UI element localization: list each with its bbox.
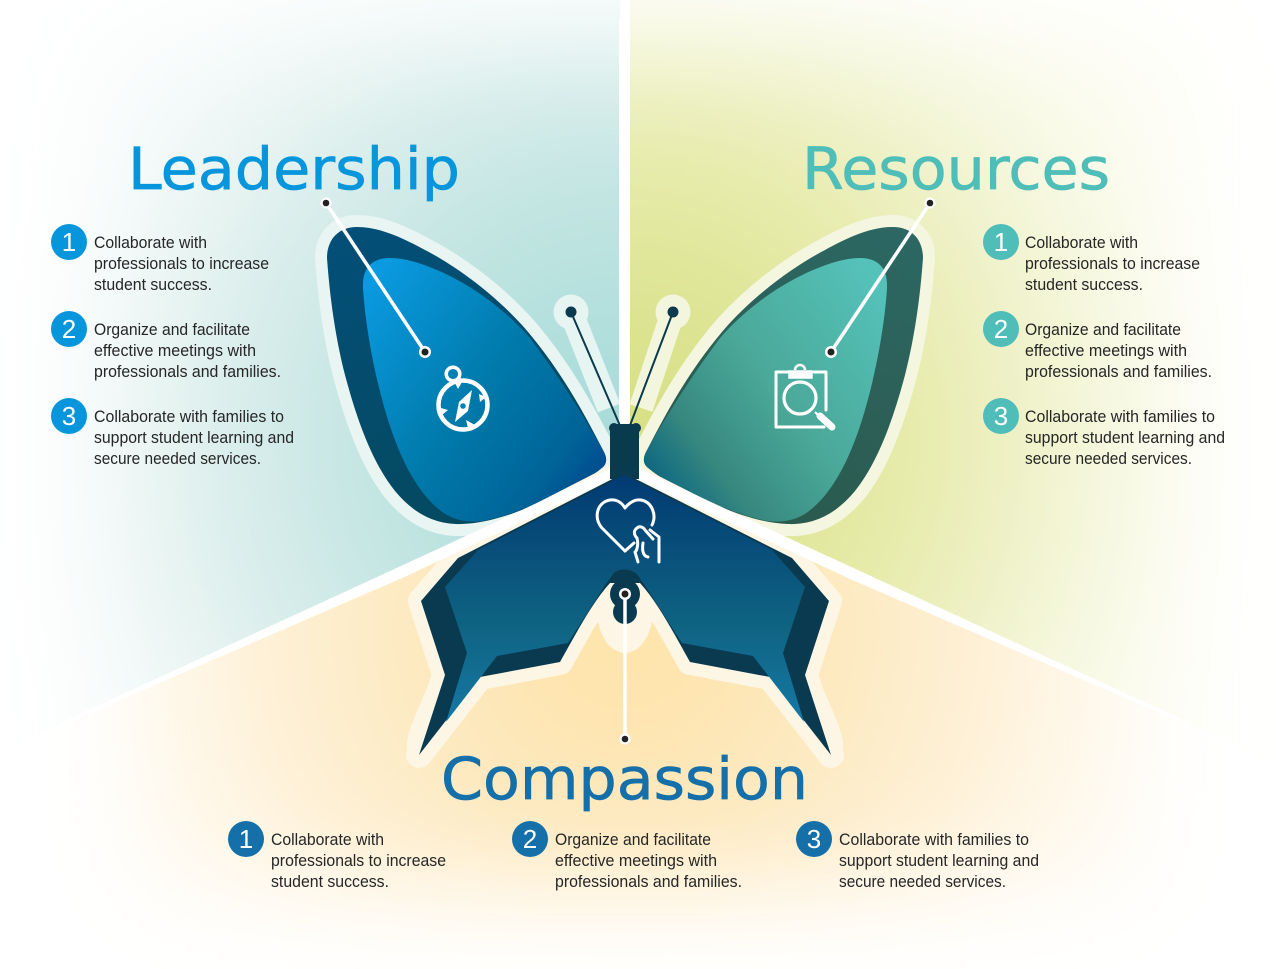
resources item 3: support student learning and bbox=[1025, 428, 1225, 447]
background sector: resources bbox=[630, 0, 1204, 718]
leadership item 3: Collaborate with families to bbox=[94, 407, 284, 426]
compassion item 3: support student learning and bbox=[839, 851, 1039, 870]
background sector: compassion bbox=[118, 561, 1148, 942]
heading: Leadership: Leadership bbox=[128, 135, 460, 203]
heading: Compassion: Compassion bbox=[441, 745, 808, 813]
resources item 3: Collaborate with families to bbox=[1025, 407, 1215, 426]
antennae lines bbox=[566, 306, 678, 428]
compassion item 1: 1 bbox=[239, 824, 253, 854]
leadership item 1 bbox=[51, 224, 269, 294]
resources item 3: 3 bbox=[994, 401, 1008, 431]
right wing bbox=[644, 227, 923, 524]
leadership item 1: professionals to increase bbox=[94, 254, 269, 273]
resources item 1: student success. bbox=[1025, 275, 1143, 294]
resources item 2 bbox=[983, 311, 1212, 381]
compassion item 2: 2 bbox=[523, 824, 537, 854]
leadership item 2 bbox=[51, 311, 281, 381]
resources item 2: effective meetings with bbox=[1025, 341, 1187, 360]
compassion item 3: secure needed services. bbox=[839, 872, 1006, 891]
compassion item 2: effective meetings with bbox=[555, 851, 717, 870]
leadership item 2: professionals and families. bbox=[94, 362, 281, 381]
compassion item 2: professionals and families. bbox=[555, 872, 742, 891]
heading: Resources: Resources bbox=[802, 135, 1110, 203]
compassion item 3: 3 bbox=[807, 824, 821, 854]
left wing bbox=[327, 227, 606, 524]
icon: heart in hand bbox=[597, 500, 659, 562]
compassion item 2 bbox=[512, 821, 742, 891]
divider lines bbox=[60, 20, 1190, 726]
resources item 3 bbox=[983, 398, 1225, 468]
leadership item 3: secure needed services. bbox=[94, 449, 261, 468]
compassion item 1: professionals to increase bbox=[271, 851, 446, 870]
butterfly upper body bbox=[609, 423, 641, 479]
resources item 3: secure needed services. bbox=[1025, 449, 1192, 468]
compassion item 1: student success. bbox=[271, 872, 389, 891]
lower wing halo bbox=[407, 473, 843, 761]
resources item 2: 2 bbox=[994, 314, 1008, 344]
resources item 1: professionals to increase bbox=[1025, 254, 1200, 273]
leadership item 2: 2 bbox=[62, 314, 76, 344]
leadership item 1: 1 bbox=[62, 227, 76, 257]
antennae halos bbox=[554, 294, 690, 408]
leadership item 3 bbox=[51, 398, 294, 468]
leadership item 2: Organize and facilitate bbox=[94, 320, 250, 339]
resources item 2: Organize and facilitate bbox=[1025, 320, 1181, 339]
compassion item 2: Organize and facilitate bbox=[555, 830, 711, 849]
leadership item 3: 3 bbox=[62, 401, 76, 431]
resources item 1 bbox=[983, 224, 1200, 294]
lower wing bbox=[419, 473, 831, 755]
compassion item 3 bbox=[796, 821, 1039, 891]
icon: compass bbox=[438, 367, 488, 430]
resources item 1: Collaborate with bbox=[1025, 233, 1138, 252]
leader line: leadership bbox=[320, 198, 431, 358]
leadership item 1: Collaborate with bbox=[94, 233, 207, 252]
compassion item 1 bbox=[228, 821, 446, 891]
leadership item 1: student success. bbox=[94, 275, 212, 294]
icon: clipboard with magnifier bbox=[776, 365, 832, 427]
compassion item 3: Collaborate with families to bbox=[839, 830, 1029, 849]
compassion item 1: Collaborate with bbox=[271, 830, 384, 849]
leader line: resources bbox=[825, 198, 936, 358]
resources item 1: 1 bbox=[994, 227, 1008, 257]
leadership item 2: effective meetings with bbox=[94, 341, 256, 360]
background sector: leadership bbox=[84, 0, 620, 697]
leadership item 3: support student learning and bbox=[94, 428, 294, 447]
resources item 2: professionals and families. bbox=[1025, 362, 1212, 381]
leader line: compassion bbox=[619, 588, 631, 744]
